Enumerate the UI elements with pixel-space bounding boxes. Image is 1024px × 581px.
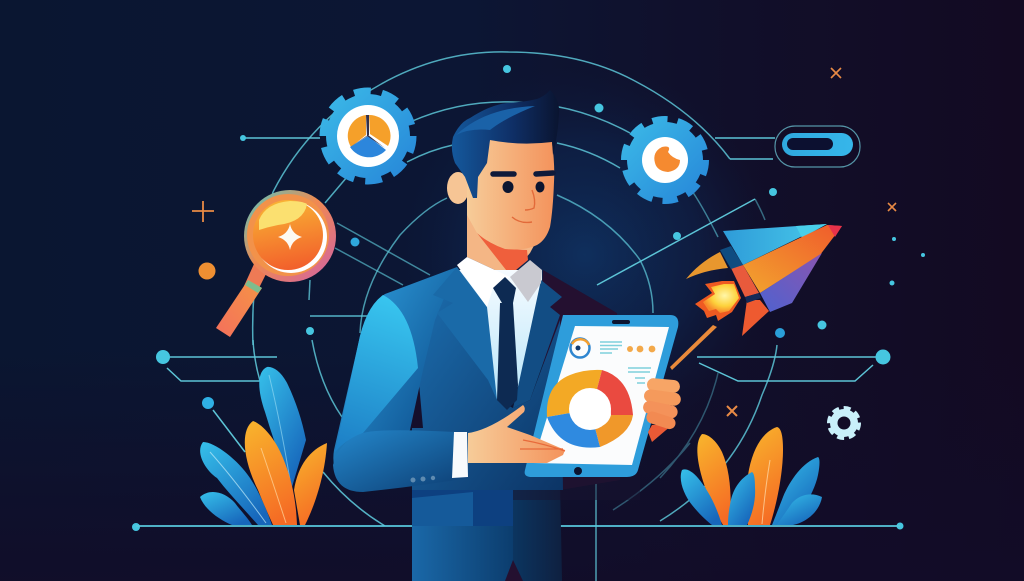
eyebrows (493, 173, 553, 174)
face (467, 140, 554, 250)
hull (723, 224, 827, 265)
eyes (502, 181, 544, 193)
ear (447, 172, 469, 204)
businessman (333, 90, 682, 581)
nose and smile (512, 190, 535, 222)
plant right (681, 427, 822, 525)
neck (467, 200, 545, 277)
jacket torso (412, 278, 563, 490)
legs and lower jacket (412, 480, 562, 581)
shirt (458, 270, 542, 400)
tie (493, 277, 518, 410)
collar left (457, 257, 510, 307)
forearm (333, 430, 468, 492)
upper arm (333, 267, 457, 490)
plant left (200, 367, 327, 525)
right hand (642, 378, 682, 442)
collar right (510, 260, 542, 302)
icon: gear with pie chart right (626, 121, 704, 199)
icon: small white gear (830, 408, 858, 438)
icon: decorative dots (132, 65, 925, 531)
tablet dots (627, 346, 655, 352)
donut chart (547, 370, 633, 448)
fins (686, 252, 728, 279)
tablet logo (570, 338, 590, 358)
cuff (452, 432, 468, 478)
icon: orange markers (192, 68, 896, 416)
right lapel (513, 280, 562, 408)
maroon shoulder shadow (540, 270, 620, 490)
icon: toggle pill (775, 126, 860, 167)
tablet (525, 315, 678, 477)
left hand (468, 405, 565, 463)
upper arm highlight (335, 295, 418, 452)
sleeve buttons (410, 476, 435, 482)
icon: magnifying glass (216, 190, 336, 337)
icon: rocket (670, 224, 842, 370)
base line (136, 525, 900, 527)
icon: gear with pie chart left (325, 93, 411, 179)
sleeve gap (410, 372, 423, 428)
hair (452, 90, 559, 198)
left lapel (433, 267, 497, 400)
tablet text lines (600, 342, 651, 383)
flame trail (670, 325, 717, 370)
flame (695, 281, 741, 321)
orbit rings and connector lines (163, 52, 883, 581)
